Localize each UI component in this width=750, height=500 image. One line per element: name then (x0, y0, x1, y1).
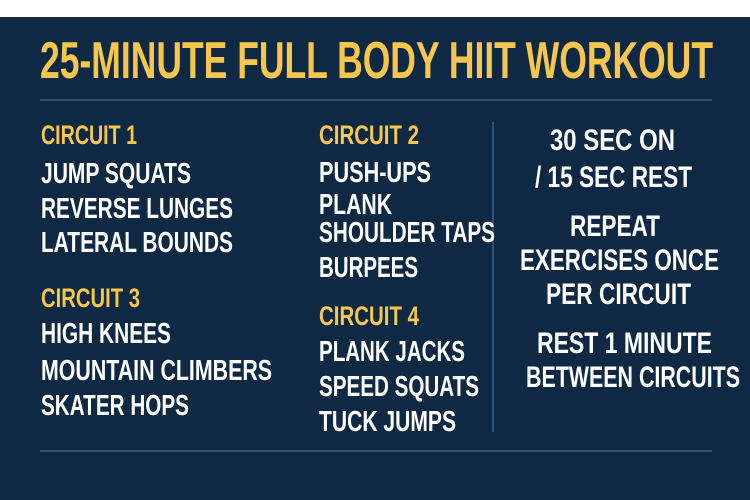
panel: circuit 3 (41, 283, 272, 422)
panel: instructions: 30 SEC ON (550, 124, 675, 157)
panel: circuit 4: SPEED SQUATS (319, 371, 479, 403)
panel: circuit 4 (319, 301, 479, 438)
panel: circuit 2 (319, 120, 495, 284)
panel: circuit 3: SKATER HOPS (41, 390, 189, 422)
panel: circuit 2: CIRCUIT 2 (319, 120, 419, 150)
panel: circuit 2: PUSH-UPS (319, 157, 431, 189)
panel: circuit 3: MOUNTAIN CLIMBERS (41, 355, 272, 387)
panel: circuit 1: LATERAL BOUNDS (41, 227, 233, 259)
panel: circuit 3: HIGH KNEES (41, 318, 171, 350)
panel: circuit 1: JUMP SQUATS (41, 158, 191, 190)
panel: instructions (520, 124, 740, 394)
panel: instructions: REPEAT (570, 210, 660, 243)
panel: circuit 4: PLANK JACKS (319, 336, 465, 368)
panel: circuit 1: REVERSE LUNGES (41, 193, 233, 225)
panel: instructions: PER CIRCUIT (546, 278, 691, 311)
panel: circuit 4: TUCK JUMPS (319, 406, 456, 438)
panel: circuit 1 (41, 120, 233, 259)
panel: circuit 2: PLANK (319, 189, 392, 221)
panel: circuit 2: SHOULDER TAPS (319, 217, 495, 249)
panel: circuit 3: CIRCUIT 3 (41, 283, 140, 313)
panel: circuit 4: CIRCUIT 4 (319, 301, 419, 331)
panel: circuit 2: BURPEES (319, 252, 418, 284)
panel: instructions: / 15 SEC REST (535, 161, 692, 194)
panel: circuit 1: CIRCUIT 1 (41, 120, 137, 150)
